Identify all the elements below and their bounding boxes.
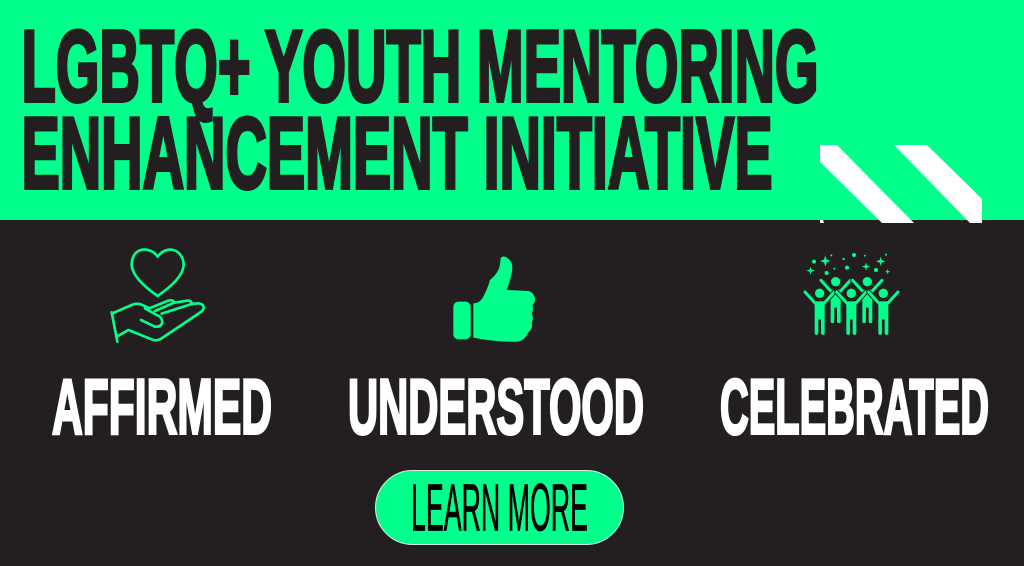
label: Affirmed: AFFIRMED bbox=[52, 362, 272, 450]
panel: green header band bbox=[0, 0, 1024, 220]
icon: thumbs up bbox=[453, 257, 535, 342]
decorative white stripes bbox=[820, 145, 982, 223]
people bbox=[805, 277, 898, 335]
sparkles bbox=[806, 253, 890, 275]
icon: celebrating crowd with sparkles bbox=[805, 253, 898, 335]
button: learn more bbox=[376, 470, 624, 546]
title bbox=[22, 11, 818, 210]
text: LEARN MORE bbox=[411, 470, 588, 546]
label: Understood: UNDERSTOOD bbox=[348, 362, 644, 450]
icon: heart over open hand bbox=[112, 250, 204, 342]
